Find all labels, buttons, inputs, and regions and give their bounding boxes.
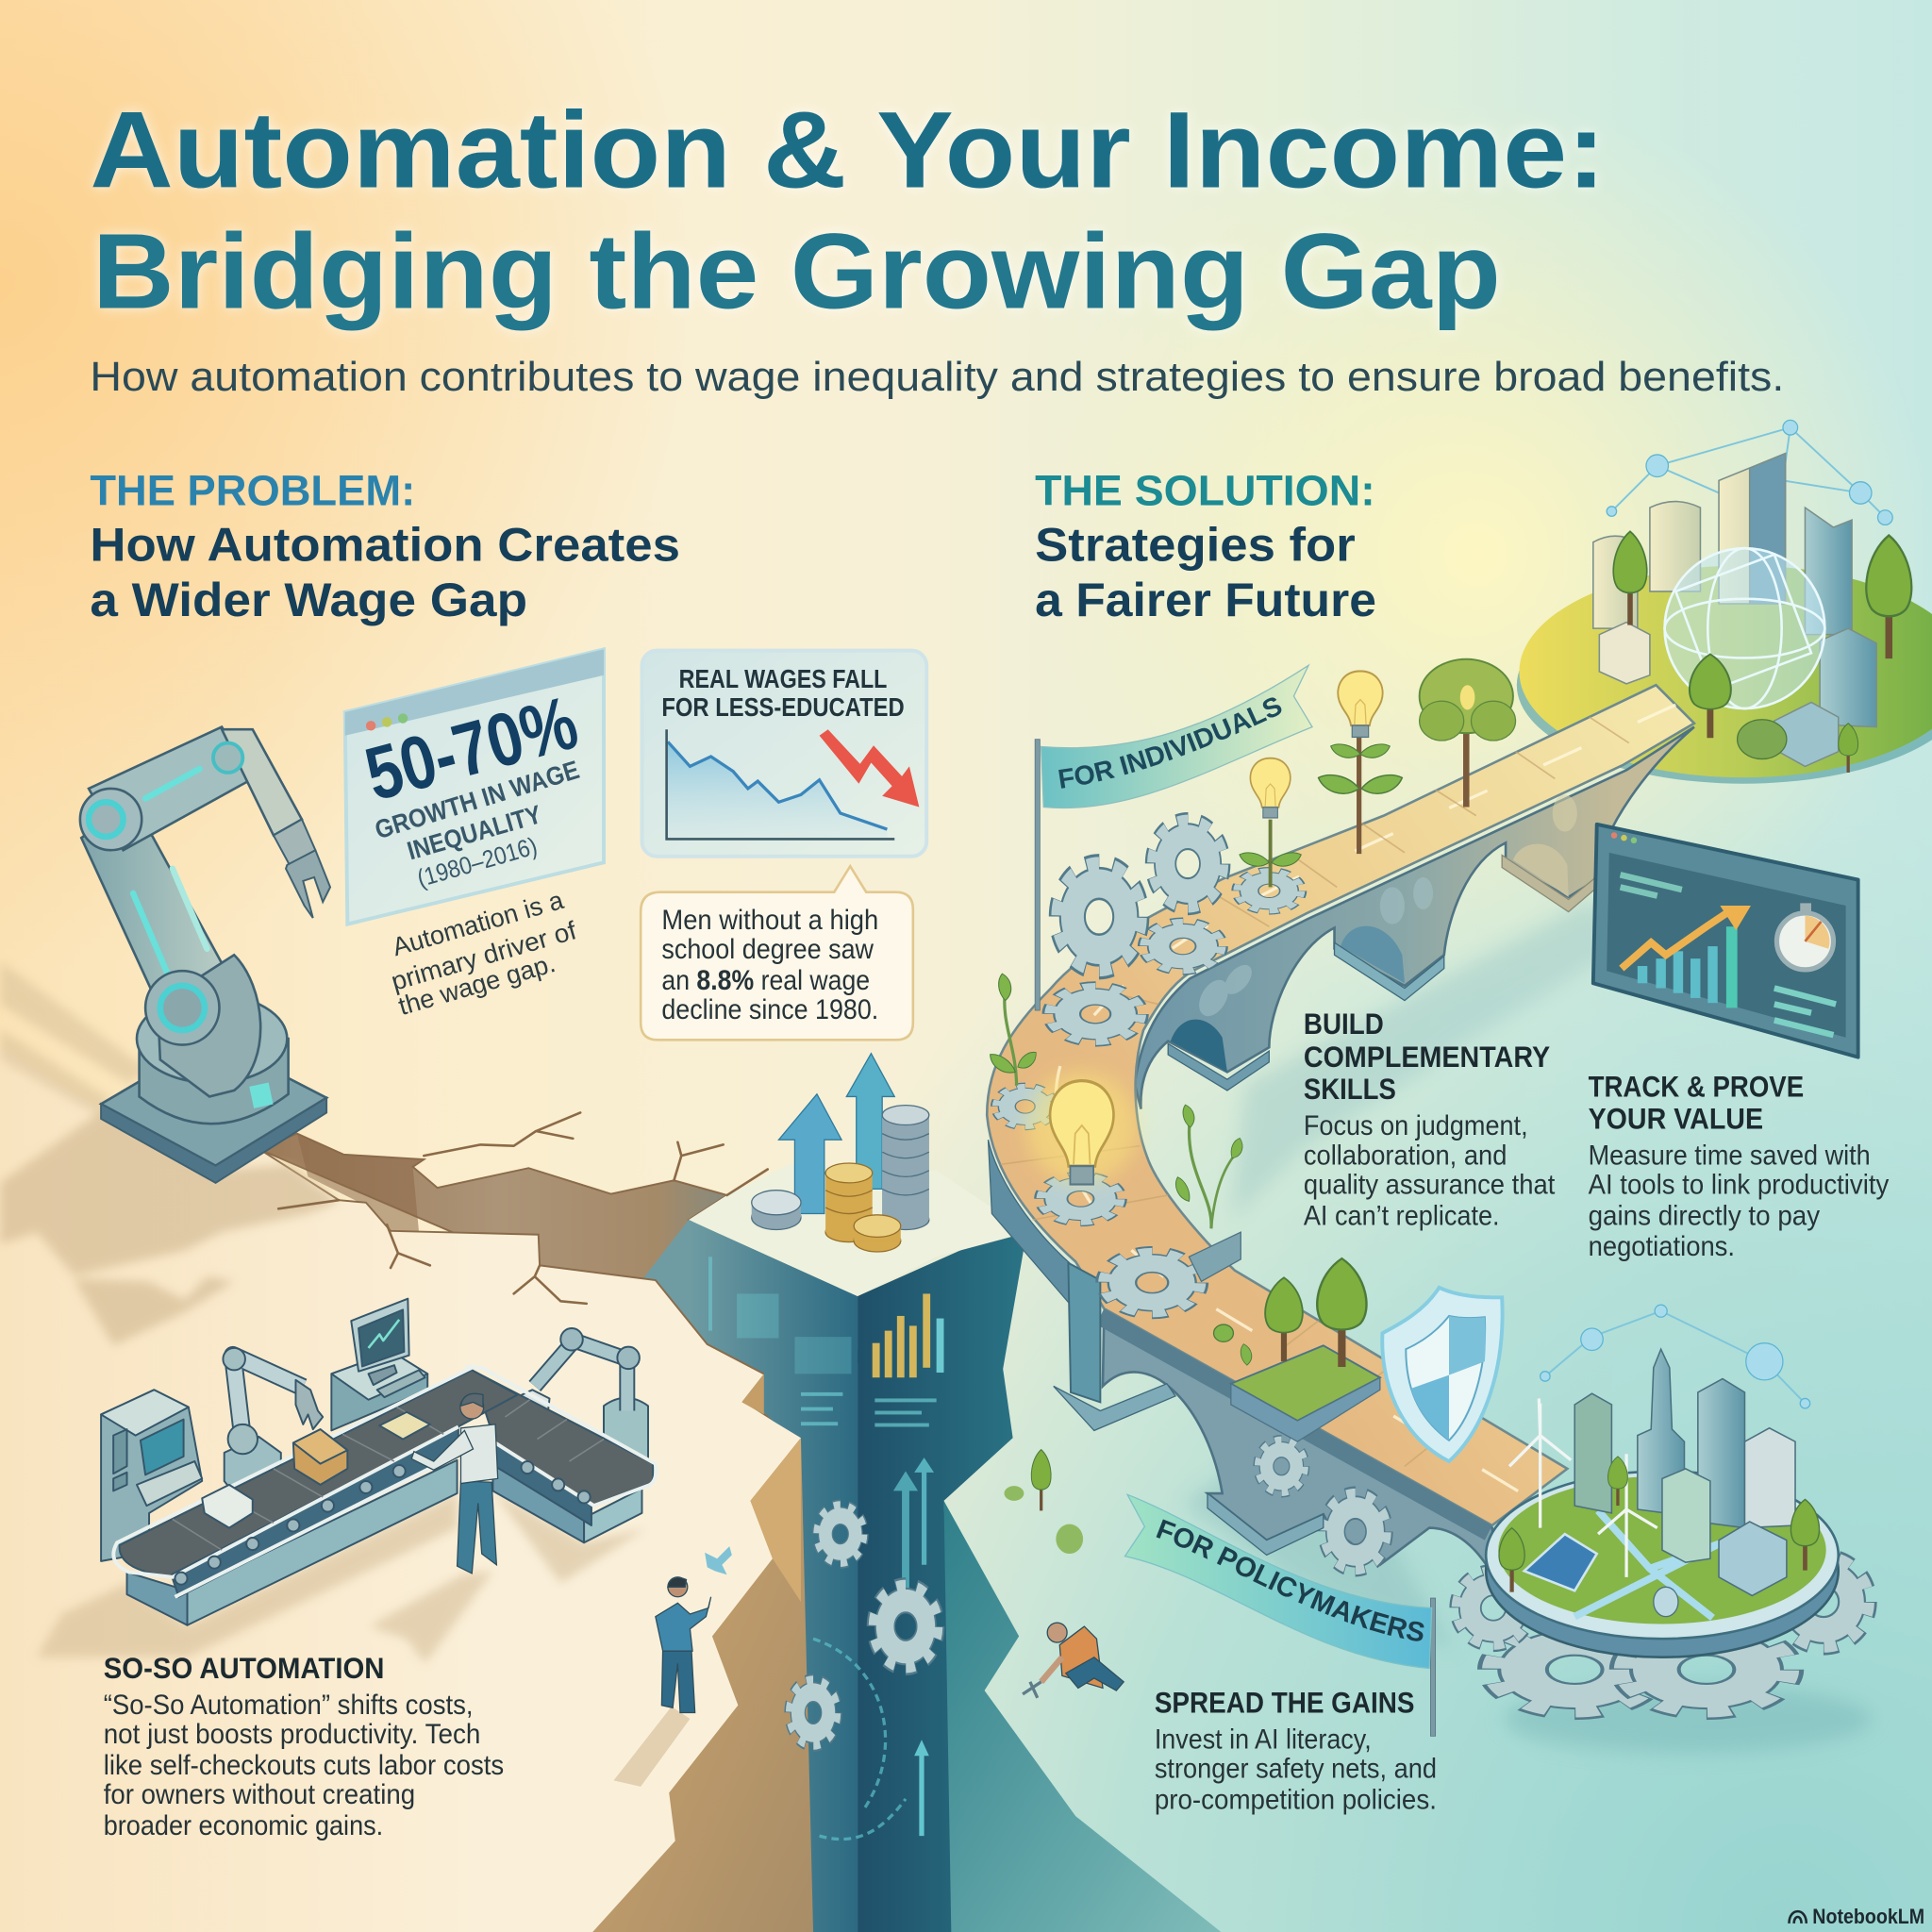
lower gears <box>1324 1494 1387 1569</box>
text block: track and prove your value: TRACK & PROVE <box>1589 1070 1804 1103</box>
globe <box>1665 548 1824 708</box>
illustration: observer at cliff edge <box>613 1546 732 1787</box>
text block: so-so automation: broader economic gains. <box>104 1810 383 1841</box>
illustration: small plants on right cliff <box>1004 1450 1083 1554</box>
stat card: 50-70%: GROWTH IN WAGE <box>372 755 583 844</box>
stopwatch <box>1776 903 1834 970</box>
icon: robotic arm <box>80 727 330 1183</box>
caption: automation driver <box>388 885 580 1021</box>
callout: wage decline: Men without a high <box>661 905 878 936</box>
coin block top <box>689 1164 1029 1296</box>
stat card: 50-70% <box>345 649 604 924</box>
caption: automation driver: Automation is a <box>389 885 567 961</box>
text block: track and prove your value: gains directly to pay <box>1589 1200 1820 1231</box>
caption: automation driver: the wage gap. <box>395 948 558 1021</box>
lower joint <box>145 971 219 1045</box>
text block: spread the gains: pro-competition policies. <box>1155 1784 1437 1815</box>
title <box>90 91 1606 332</box>
conveyor base left <box>127 1573 188 1625</box>
red down arrow <box>820 729 919 808</box>
lower pier <box>1068 1263 1100 1402</box>
illustration: conveyor factory <box>37 1299 656 1657</box>
text block: track and prove your value <box>1589 1070 1890 1262</box>
spandrels and arches <box>1135 727 1694 1109</box>
belt ribs <box>173 1400 604 1550</box>
illustration: kneeling repair worker <box>1023 1623 1124 1698</box>
bar chart <box>1638 926 1738 1008</box>
text block: spread the gains: SPREAD THE GAINS <box>1155 1687 1414 1720</box>
heading: the solution: a Fairer Future <box>1035 574 1376 626</box>
ground shadow <box>1503 1684 1873 1754</box>
text block: spread the gains: Invest in AI literacy, <box>1155 1724 1372 1755</box>
chasm arrows <box>893 1457 934 1836</box>
kiosk <box>101 1390 202 1561</box>
rollers <box>175 1461 591 1585</box>
right cliff face <box>943 1501 1221 1932</box>
banner: for individuals <box>1034 664 1313 1011</box>
heading: the problem <box>90 467 680 626</box>
banner: for individuals: FOR INDIVIDUALS <box>1058 697 1281 789</box>
chasm gears <box>817 1506 863 1562</box>
title: Automation & Your Income: <box>90 91 1606 211</box>
text block: so-so automation <box>104 1652 504 1841</box>
title: Bridging the Growing Gap <box>92 212 1501 332</box>
arch infill <box>1171 1020 1227 1072</box>
upper arm <box>89 727 253 850</box>
trees <box>1499 1528 1524 1592</box>
illustration: lower city on gears <box>1457 1305 1873 1754</box>
gears under city <box>1494 1628 1655 1711</box>
text block: spread the gains <box>1155 1687 1437 1815</box>
text block: build complementary skills: Focus on judgment, <box>1304 1110 1528 1141</box>
chart card: real wages fall: REAL WAGES FALL <box>679 664 887 693</box>
heading: the problem: How Automation Creates <box>90 518 680 571</box>
white package <box>202 1485 253 1528</box>
outer wall below bend <box>989 1140 1070 1304</box>
forearm <box>222 729 302 836</box>
illustration: factory worker <box>370 1393 498 1663</box>
stat card: 50-70%: 50-70% <box>357 680 586 816</box>
heading: the problem: a Wider Wage Gap <box>90 574 527 626</box>
line chart <box>667 729 894 839</box>
solar panel <box>1524 1534 1597 1591</box>
heading: the solution: Strategies for <box>1035 518 1356 571</box>
mottled pattern <box>1193 794 1577 1022</box>
subtitle: How automation contributes to wage inequality and strategies to ensure broad benefits. <box>90 355 1784 400</box>
text block: so-so automation: for owners without creating <box>104 1779 415 1810</box>
text block: build complementary skills <box>1304 1008 1555 1231</box>
buildings <box>1574 1349 1795 1595</box>
water paths <box>1574 1509 1787 1618</box>
chart card: real wages fall: FOR LESS-EDUCATED <box>661 692 905 722</box>
right belt <box>472 1370 653 1506</box>
conveyor base right <box>492 1465 584 1542</box>
network <box>1611 427 1885 518</box>
chart card: real wages fall <box>641 651 926 857</box>
planter box <box>1189 1232 1241 1281</box>
text block: build complementary skills: SKILLS <box>1304 1073 1396 1106</box>
deck planks <box>1001 717 1629 1466</box>
floor shadows <box>37 1491 647 1657</box>
parcel <box>379 1412 430 1440</box>
lower deck edge <box>1096 1308 1492 1541</box>
illustration: upper city island <box>1517 420 1932 784</box>
callout: wage decline: decline since 1980. <box>661 994 878 1025</box>
text block: track and prove your value: YOUR VALUE <box>1589 1102 1763 1135</box>
text block: spread the gains: stronger safety nets, and <box>1155 1754 1437 1785</box>
text block: so-so automation: not just boosts productivity. Tech <box>104 1719 480 1750</box>
cast shadow under bridge <box>1232 899 1639 1220</box>
text block: build complementary skills: quality assurance that <box>1304 1170 1555 1201</box>
right robot <box>604 1398 648 1478</box>
network <box>1545 1311 1805 1404</box>
swirl <box>813 1639 906 1840</box>
robot shadow on ground <box>0 961 339 1345</box>
text block: build complementary skills: BUILD <box>1304 1008 1384 1041</box>
text block: build complementary skills: AI can’t replicate. <box>1304 1200 1500 1231</box>
caption: automation driver: primary driver of <box>388 915 580 996</box>
left cliff rock face <box>592 1438 813 1932</box>
text block: build complementary skills: COMPLEMENTARY <box>1304 1041 1550 1074</box>
callout: wage decline: school degree saw <box>661 934 874 965</box>
chasm data details <box>708 1257 943 1840</box>
silver coin stack <box>882 1106 929 1230</box>
title: Bridging the Growing Gap <box>92 212 1501 332</box>
banner: for policymakers <box>1124 1493 1436 1737</box>
deck centre line <box>1056 705 1675 1497</box>
side list <box>1774 989 1836 1035</box>
shoulder joint <box>80 789 142 850</box>
stat card: 50-70%: (1980–2016) <box>414 831 541 892</box>
city disc <box>1486 1485 1839 1657</box>
heading: the solution: THE SOLUTION: <box>1035 467 1375 515</box>
wind turbines <box>1509 1398 1657 1577</box>
gripper <box>286 850 330 918</box>
heading: the problem: THE PROBLEM: <box>90 467 415 515</box>
cardboard box <box>293 1429 347 1485</box>
text block: track and prove your value: Measure time saved with <box>1589 1140 1871 1171</box>
left robot base <box>225 1437 281 1493</box>
lower structure <box>1103 1313 1497 1583</box>
chasm left face <box>641 1220 858 1932</box>
title: Automation & Your Income: <box>90 91 1606 211</box>
right vine <box>1189 1115 1211 1228</box>
illustration: gears on bridge <box>997 822 1300 1312</box>
trees <box>1866 536 1911 658</box>
illustration: dashboard screen <box>1593 824 1858 1058</box>
park <box>1498 1476 1826 1624</box>
text block: track and prove your value: negotiations. <box>1589 1231 1735 1262</box>
sprout stem 2 <box>1357 727 1361 854</box>
towers <box>1593 454 1876 766</box>
glowing bulb <box>1026 1072 1138 1183</box>
bridge deck <box>987 685 1694 1525</box>
sprout tree <box>1464 727 1469 808</box>
callout: wage decline <box>641 866 913 1040</box>
banner: for policymakers: FOR POLICYMAKERS <box>1157 1519 1424 1641</box>
pier bases <box>1168 1043 1269 1091</box>
gold coin stack <box>825 1163 873 1242</box>
growth arrow <box>1622 909 1732 969</box>
text block: so-so automation: SO-SO AUTOMATION <box>104 1652 385 1685</box>
crack and chasm <box>0 1047 1221 1932</box>
sprout stem 1 <box>1269 820 1272 887</box>
stat card: 50-70%: INEQUALITY <box>404 799 544 865</box>
text block: track and prove your value: AI tools to link productivity <box>1589 1170 1890 1201</box>
illustration: bridge structure <box>987 685 1694 1651</box>
icon: cracks <box>278 1112 768 1304</box>
lower pier bases <box>1054 1384 1175 1430</box>
heading: the solution <box>1035 467 1376 626</box>
dome <box>1654 1587 1678 1617</box>
icon: money stack and growth arrows <box>752 1054 929 1252</box>
text block: so-so automation: “So-So Automation” shifts costs, <box>104 1690 474 1721</box>
text block: build complementary skills: collaboration, and <box>1304 1140 1507 1171</box>
lower arm <box>81 801 234 1023</box>
chasm right face <box>858 1220 1029 1932</box>
left belt <box>120 1370 518 1577</box>
monitor station <box>331 1352 427 1430</box>
text block: so-so automation: like self-checkouts cuts labor costs <box>104 1750 504 1781</box>
callout: wage decline: an 8.8% real wage <box>661 965 870 996</box>
icon: shield <box>1382 1288 1503 1461</box>
data bars <box>873 1293 943 1377</box>
chasm shading facets <box>297 1134 424 1232</box>
deck planter <box>1231 1345 1380 1421</box>
left vine <box>1005 989 1017 1086</box>
monitor <box>351 1299 409 1372</box>
illustration: sprouts, bulbs and trees <box>986 659 1516 1441</box>
lower left plate <box>0 1047 801 1932</box>
